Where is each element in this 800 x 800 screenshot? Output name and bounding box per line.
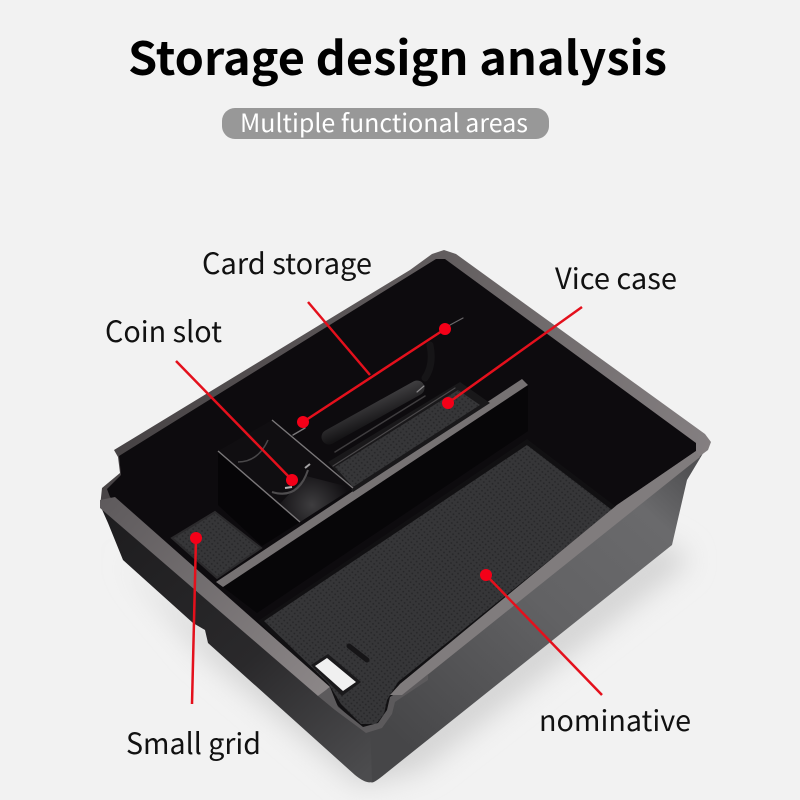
title: Storage design analysis [128,23,667,89]
callout: vice case [442,256,677,409]
divider edges [218,420,353,522]
front notch edge [318,673,428,733]
outer body right face [370,445,708,782]
ground shadow [108,540,690,785]
label cutout [311,646,367,696]
back rim [100,250,711,728]
storage box product [100,250,711,785]
main compartment mat [258,439,619,727]
coin slot cradle [218,420,353,522]
subtitle pill: Multiple functional areas [240,104,528,140]
callout: coin slot: Coin slot [105,309,222,351]
callout: card storage [202,241,451,428]
callout: vice case: Vice case [555,256,677,298]
callout: small grid: Small grid [126,721,261,763]
front right rim [390,451,700,695]
vice case mat [328,382,490,492]
small grid mat [172,512,261,578]
front left rim [100,497,330,696]
callout: nominative [480,569,691,740]
callout: small grid [126,532,261,763]
interior well [107,259,696,690]
card slot bar [293,318,463,466]
callout: card storage: Card storage [202,241,372,283]
outer body left face [100,505,372,782]
long divider wall [216,379,528,613]
callout: nominative: nominative [539,698,691,740]
coin slot divider left [218,451,300,546]
callout: coin slot [105,309,298,486]
